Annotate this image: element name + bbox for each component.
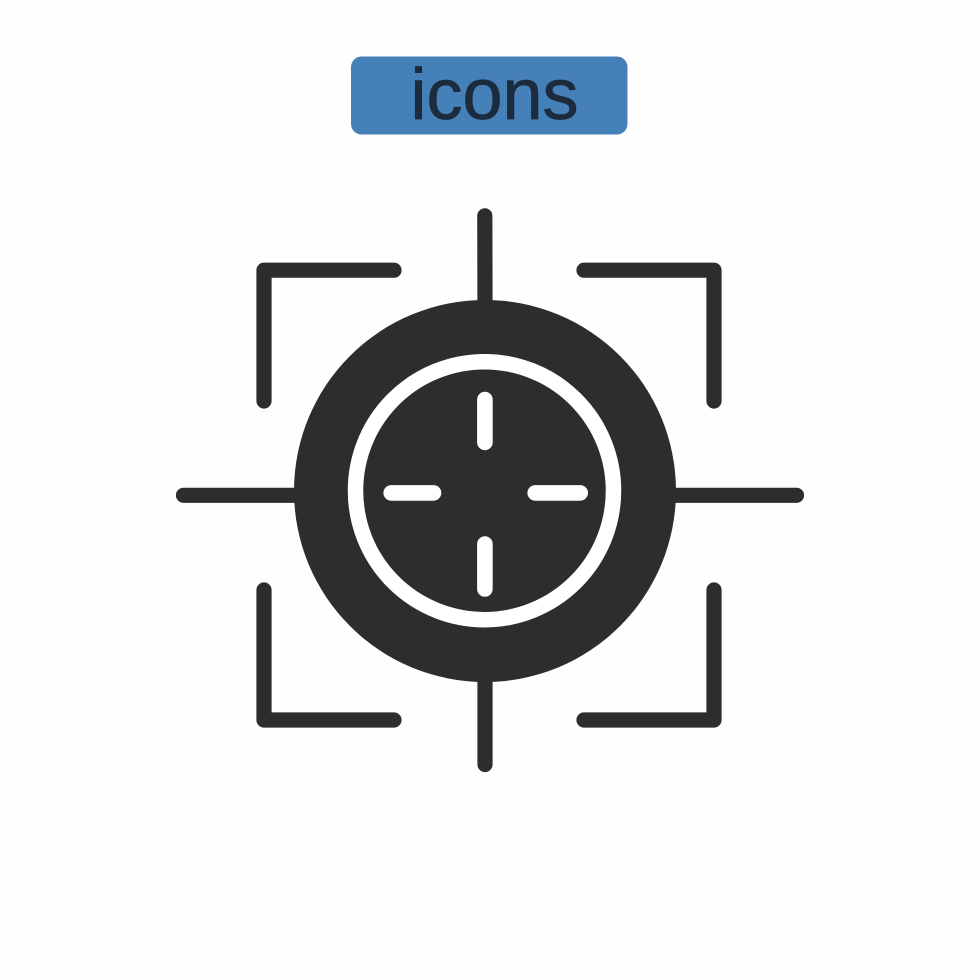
white ring [356, 362, 614, 620]
top tick [477, 216, 493, 302]
right tick [673, 488, 796, 503]
badge: icons label [351, 55, 628, 135]
left tick [184, 488, 297, 503]
corner bracket: bottom right [584, 590, 714, 720]
inner tick marks [391, 400, 580, 589]
badge: icons label: icons [410, 55, 579, 135]
outer disc [294, 300, 676, 682]
corner bracket: top left [264, 270, 394, 401]
bottom tick [477, 680, 493, 764]
corner bracket: bottom left [264, 590, 394, 720]
corner bracket: top right [584, 270, 714, 401]
icon: crosshair target [184, 216, 796, 765]
